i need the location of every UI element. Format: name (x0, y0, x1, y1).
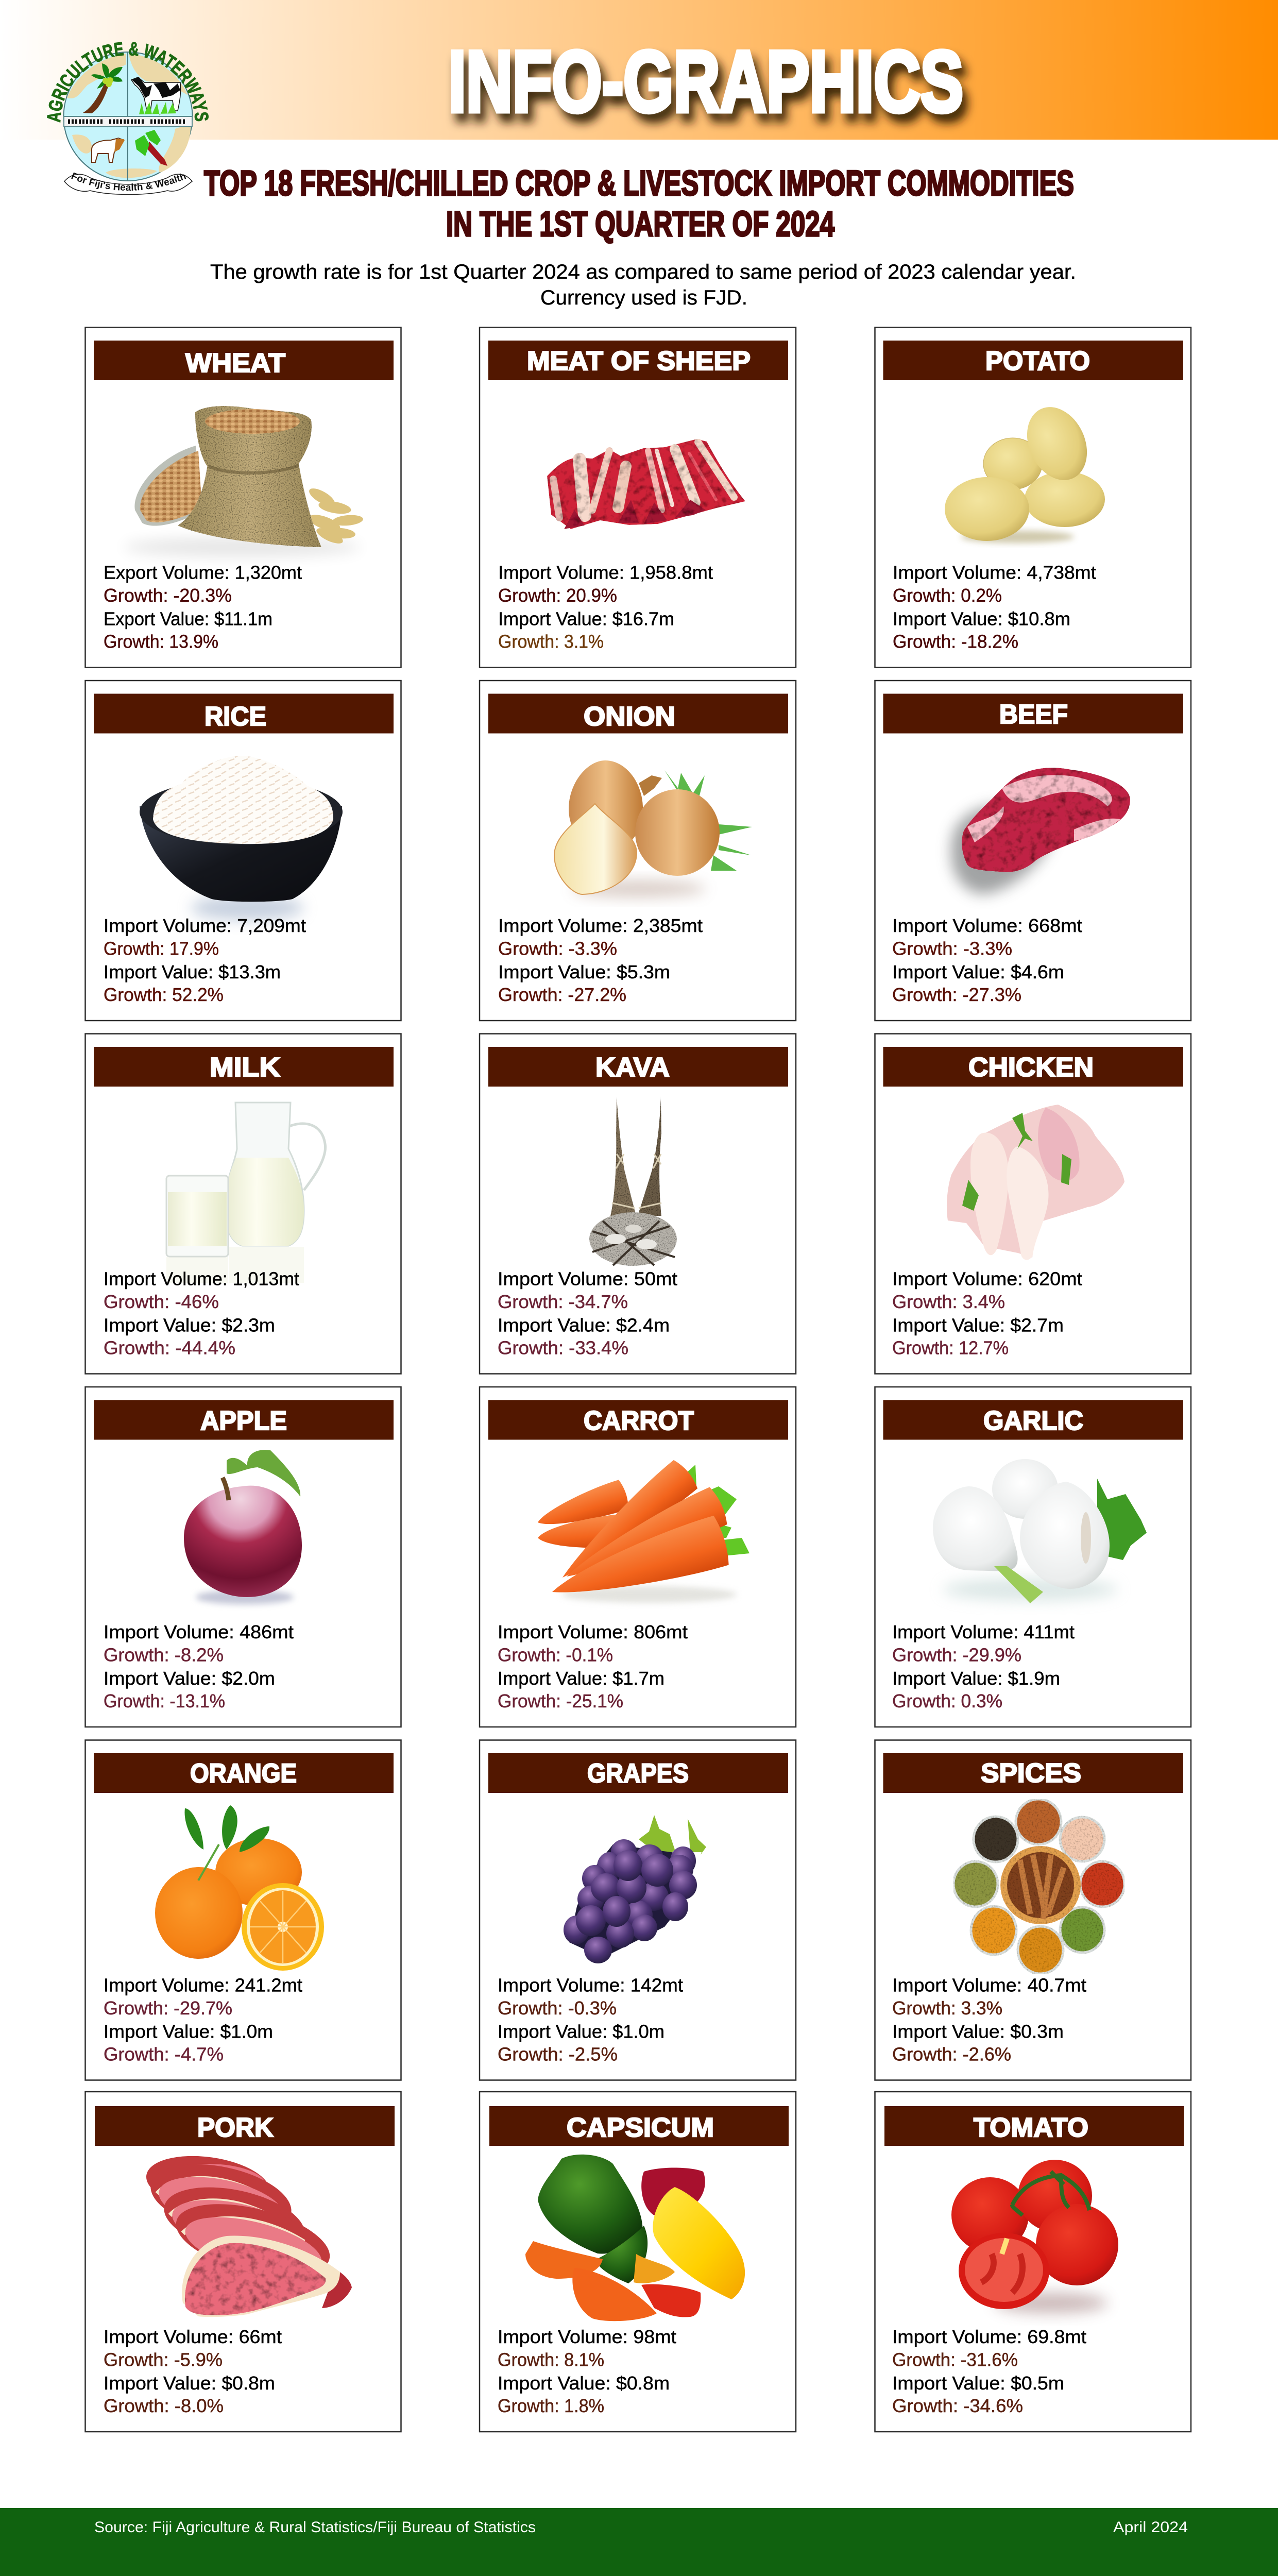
stats: pork: Import Value: $0.8m (104, 2372, 275, 2394)
heading: potato: POTATO (985, 346, 1090, 376)
stats: orange: Import Volume: 241.2mt (104, 1974, 302, 1996)
heading: tomato: TOMATO (974, 2113, 1088, 2143)
stats: potato (893, 562, 1096, 652)
image: kava bundles (589, 1096, 677, 1266)
heading: chicken: CHICKEN (968, 1053, 1094, 1082)
stats: rice: Import Volume: 7,209mt (104, 915, 306, 936)
panel: carrot (480, 1387, 796, 1727)
panel: rice (86, 681, 401, 1021)
stats: pork (104, 2326, 282, 2416)
stats: orange: Import Value: $1.0m (104, 2021, 273, 2042)
panel: garlic (875, 1387, 1191, 1727)
stats: orange: Growth: -4.7% (104, 2043, 224, 2065)
stats: rice (104, 915, 306, 1005)
image: capsicums (525, 2155, 745, 2321)
date: April 2024 (1113, 2519, 1188, 2536)
heading: orange: ORANGE (190, 1759, 297, 1789)
stats: pork: Import Volume: 66mt (104, 2326, 282, 2347)
stats: spices: Growth: 3.3% (892, 1997, 1002, 2019)
panel: potato (875, 328, 1191, 668)
stats: carrot: Growth: -25.1% (498, 1690, 623, 1711)
panel: grapes (480, 1740, 796, 2080)
stats: potato: Growth: 0.2% (893, 585, 1002, 606)
stats: garlic: Import Value: $1.9m (892, 1668, 1060, 1689)
stats: capsicum: Growth: 8.1% (498, 2349, 604, 2370)
image: apple (184, 1450, 302, 1604)
stats: grapes: Import Value: $1.0m (498, 2021, 664, 2042)
stats: chicken: Growth: 3.4% (892, 1291, 1005, 1312)
stats: chicken: Import Volume: 620mt (892, 1268, 1082, 1289)
intro note: Currency used is FJD. (540, 286, 747, 309)
logo taro plant (135, 130, 167, 166)
panel: meat of sheep (480, 328, 796, 668)
stats: beef: Import Volume: 668mt (892, 915, 1082, 936)
stats: kava: Import Volume: 50mt (498, 1268, 677, 1289)
stats: meat of sheep: Import Value: $16.7m (498, 608, 674, 630)
stats: rice: Growth: 17.9% (104, 938, 219, 959)
panel: capsicum (480, 2092, 796, 2432)
logo cow (131, 77, 181, 116)
logo pattern band (64, 116, 192, 127)
stats: apple: Import Volume: 486mt (104, 1621, 294, 1642)
stats: grapes (498, 1974, 683, 2065)
image: onions (554, 760, 752, 897)
stats: onion: Growth: -3.3% (498, 938, 617, 959)
stats: potato: Import Volume: 4,738mt (893, 562, 1096, 583)
stats: carrot: Import Volume: 806mt (498, 1621, 688, 1642)
image: grapes (564, 1815, 706, 1963)
header band (0, 0, 1278, 140)
stats: grapes: Growth: -0.3% (498, 1997, 617, 2019)
stats: kava (498, 1268, 677, 1358)
heading: wheat: WHEAT (185, 348, 285, 378)
subtitle (204, 163, 1074, 244)
panel: wheat (86, 328, 401, 668)
image: chicken pieces (947, 1105, 1124, 1260)
stats: spices: Growth: -2.6% (892, 2043, 1011, 2065)
stats: chicken: Import Value: $2.7m (892, 1315, 1064, 1335)
stats: kava: Growth: -33.4% (498, 1337, 628, 1358)
stats: apple: Growth: -13.1% (104, 1690, 225, 1711)
intro note: The growth rate is for 1st Quarter 2024 as compared to same period of 2023 calendar year. (210, 261, 1076, 283)
stats: tomato: Growth: -34.6% (892, 2395, 1023, 2416)
stats: onion: Import Value: $5.3m (498, 961, 670, 982)
subtitle: IN THE 1ST QUARTER OF 2024 (446, 204, 834, 244)
image: oranges (155, 1805, 324, 1971)
stats: wheat: Export Volume: 1,320mt (104, 562, 302, 583)
stats: rice: Growth: 52.2% (104, 984, 224, 1005)
image: pork chops (143, 2149, 352, 2317)
stats: beef: Growth: -3.3% (892, 938, 1012, 959)
stats: wheat: Export Value: $11.1m (104, 608, 272, 630)
stats: capsicum: Growth: 1.8% (498, 2395, 604, 2416)
stats: tomato: Growth: -31.6% (892, 2349, 1018, 2370)
heading: milk: MILK (210, 1053, 280, 1082)
stats: apple: Import Value: $2.0m (104, 1668, 275, 1689)
image: rice bowl (140, 756, 343, 920)
stats: garlic: Import Volume: 411mt (892, 1621, 1075, 1642)
stats: wheat: Growth: 13.9% (104, 631, 218, 652)
stats: chicken: Growth: 12.7% (892, 1337, 1009, 1358)
stats: pork: Growth: -8.0% (104, 2395, 224, 2416)
panel: kava (480, 1033, 796, 1374)
stats: kava: Growth: -34.7% (498, 1291, 628, 1312)
stats: orange (104, 1974, 302, 2065)
image: potatoes (945, 397, 1105, 543)
logo ribbon: For Fiji's Health & Wealth (71, 172, 186, 191)
image: spices bowls (953, 1799, 1124, 1974)
panel: beef (875, 681, 1191, 1021)
stats: carrot (498, 1621, 688, 1711)
stats: capsicum: Import Volume: 98mt (498, 2326, 676, 2347)
logo arc text: AGRICULTURE & WATERWAYS (47, 42, 209, 123)
image: tomatoes (951, 2160, 1118, 2313)
stats: milk: Growth: -46% (104, 1291, 219, 1312)
stats: onion: Growth: -27.2% (498, 984, 626, 1005)
stats: grapes: Growth: -2.5% (498, 2043, 618, 2065)
heading: carrot: CARROT (584, 1406, 694, 1436)
stats: meat of sheep: Growth: 3.1% (498, 631, 604, 652)
panel: chicken (875, 1033, 1191, 1374)
stats: grapes: Import Volume: 142mt (498, 1974, 683, 1996)
stats: milk: Import Value: $2.3m (104, 1315, 275, 1335)
stats: potato: Growth: -18.2% (893, 631, 1018, 652)
image: wheat sack (124, 406, 364, 556)
image: beef steak (951, 768, 1130, 894)
stats: pork: Growth: -5.9% (104, 2349, 223, 2370)
heading: garlic: GARLIC (983, 1406, 1083, 1436)
stats: kava: Import Value: $2.4m (498, 1315, 670, 1335)
stats: carrot: Import Value: $1.7m (498, 1668, 664, 1689)
stats: wheat (104, 562, 302, 652)
stats: capsicum (498, 2326, 676, 2416)
image: ribs (547, 439, 745, 529)
panel: spices (875, 1740, 1191, 2080)
stats: carrot: Growth: -0.1% (498, 1645, 613, 1665)
stats: onion: Import Volume: 2,385mt (498, 915, 703, 936)
stats: tomato: Import Volume: 69.8mt (892, 2326, 1086, 2347)
stats: chicken (892, 1268, 1082, 1358)
stats: milk: Growth: -44.4% (104, 1337, 235, 1358)
panel: pork (86, 2092, 401, 2432)
heading: meat of sheep: MEAT OF SHEEP (527, 346, 751, 376)
stats: capsicum: Import Value: $0.8m (498, 2372, 670, 2394)
footer (0, 2508, 1278, 2576)
stats: beef: Growth: -27.3% (892, 984, 1021, 1005)
image: carrots (533, 1458, 749, 1617)
logo sheep (92, 138, 125, 162)
stats: spices: Import Volume: 40.7mt (892, 1974, 1086, 1996)
heading: rice: RICE (205, 702, 266, 732)
stats: beef (892, 915, 1082, 1005)
stats: wheat: Growth: -20.3% (104, 585, 232, 606)
stats: tomato (892, 2326, 1086, 2416)
panel: apple (86, 1387, 401, 1727)
heading: kava: KAVA (595, 1053, 670, 1082)
stats: meat of sheep: Growth: 20.9% (498, 585, 617, 606)
stats: milk: Import Volume: 1,013mt (104, 1268, 299, 1289)
stats: garlic: Growth: 0.3% (892, 1690, 1002, 1711)
source note: Source: Fiji Agriculture & Rural Statistics/Fiji Bureau of Statistics (94, 2519, 536, 2536)
stats: meat of sheep (498, 562, 713, 652)
stats: potato: Import Value: $10.8m (893, 608, 1070, 630)
title: INFO-GRAPHICS (448, 33, 963, 130)
heading: capsicum: CAPSICUM (567, 2113, 714, 2143)
stats: beef: Import Value: $4.6m (892, 961, 1064, 982)
logo: agriculture and waterways (47, 42, 209, 195)
panel: onion (480, 681, 796, 1021)
intro note (210, 261, 1076, 309)
heading: onion: ONION (584, 702, 675, 732)
panel: tomato (875, 2092, 1191, 2432)
stats: rice: Import Value: $13.3m (104, 961, 281, 982)
heading: pork: PORK (197, 2113, 274, 2143)
heading: beef: BEEF (999, 700, 1068, 730)
stats: apple (104, 1621, 294, 1711)
image: garlic (933, 1459, 1147, 1603)
image: milk jug and glass (166, 1103, 326, 1283)
panel: orange (86, 1740, 401, 2080)
stats: spices: Import Value: $0.3m (892, 2021, 1064, 2042)
stats: orange: Growth: -29.7% (104, 1997, 232, 2019)
stats: spices (892, 1974, 1086, 2065)
heading: spices: SPICES (981, 1758, 1081, 1788)
heading: grapes: GRAPES (587, 1759, 689, 1789)
stats: meat of sheep: Import Volume: 1,958.8mt (498, 562, 713, 583)
panel: milk (86, 1033, 401, 1374)
stats: apple: Growth: -8.2% (104, 1645, 224, 1665)
stats: garlic: Growth: -29.9% (892, 1645, 1021, 1665)
stats: garlic (892, 1621, 1075, 1711)
heading: apple: APPLE (200, 1406, 287, 1436)
stats: onion (498, 915, 703, 1005)
stats: tomato: Import Value: $0.5m (892, 2372, 1064, 2394)
logo palm tree (83, 63, 123, 113)
stats: milk (104, 1268, 299, 1358)
